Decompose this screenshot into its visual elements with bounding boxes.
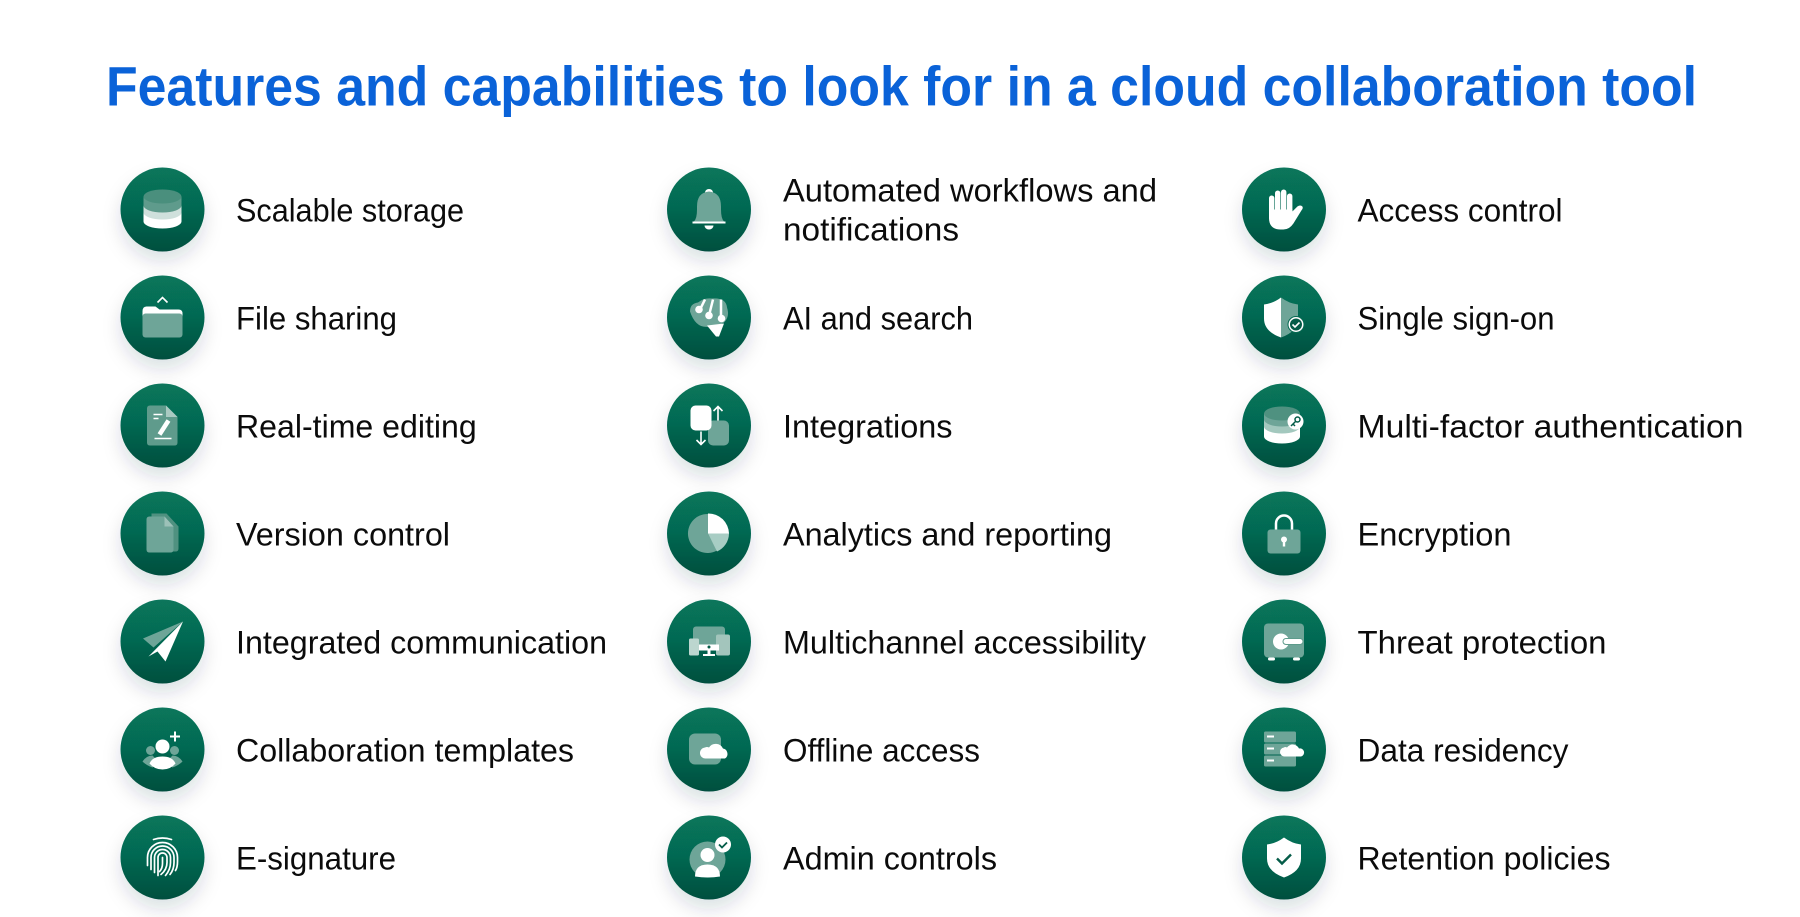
icon: user with check badge [667, 816, 751, 900]
icon: cloud on card [667, 708, 751, 792]
item: AI and search [667, 276, 973, 360]
item: Admin controls [667, 816, 997, 900]
label: E-signature [236, 840, 396, 876]
icon: document with pen [120, 384, 204, 468]
label: Admin controls [783, 840, 997, 876]
icon: fingerprint [120, 816, 204, 900]
item: Real-time editing [120, 384, 477, 468]
label: Encryption [1358, 516, 1512, 552]
item: Multichannel accessibility [667, 600, 1146, 684]
title: Features and capabilities to look for in a cloud collaboration tool [106, 54, 1697, 118]
icon: padlock [1242, 492, 1326, 576]
label: File sharing [236, 300, 397, 336]
icon: paper plane [120, 600, 204, 684]
label: Scalable storage [236, 192, 464, 228]
item: Multi-factor authentication [1242, 384, 1744, 468]
label: Real-time editing [236, 408, 477, 444]
icon: brain with funnel [667, 276, 751, 360]
item: File sharing [120, 276, 397, 360]
icon: swap squares [667, 384, 751, 468]
item: Integrated communication [120, 600, 607, 684]
label line 2: notifications [783, 212, 959, 248]
label: Version control [236, 516, 450, 552]
icon: safe [1242, 600, 1326, 684]
item: Data residency [1242, 708, 1568, 792]
label: Retention policies [1358, 840, 1610, 876]
item: Encryption [1242, 492, 1512, 576]
label: Collaboration templates [236, 732, 574, 768]
label: Multi-factor authentication [1358, 408, 1744, 444]
label: Automated workflows and [783, 172, 1157, 208]
label: Offline access [783, 732, 980, 768]
item: Integrations [667, 384, 952, 468]
icon: pie chart [667, 492, 751, 576]
label: Multichannel accessibility [783, 624, 1146, 660]
icon: folder [120, 276, 204, 360]
item: Version control [120, 492, 450, 576]
icon: database with key [1242, 384, 1326, 468]
icon: devices [667, 600, 751, 684]
icon: servers with cloud [1242, 708, 1326, 792]
item: Single sign-on [1242, 276, 1554, 360]
label: Analytics and reporting [783, 516, 1112, 552]
item: Threat protection [1242, 600, 1606, 684]
label: Data residency [1358, 732, 1568, 768]
icon: raised hand [1242, 168, 1326, 252]
item: Automated workflows and notifications [667, 168, 1157, 252]
icon: storage cylinder [120, 168, 204, 252]
item: Analytics and reporting [667, 492, 1112, 576]
item: E-signature [120, 816, 396, 900]
icon: shield with check [1242, 816, 1326, 900]
label: Integrations [783, 408, 952, 444]
label: Threat protection [1358, 624, 1606, 660]
icon: half shield with check [1242, 276, 1326, 360]
icon: people with plus [120, 708, 204, 792]
item: Collaboration templates [120, 708, 574, 792]
label: Integrated communication [236, 624, 607, 660]
label: Access control [1358, 192, 1562, 228]
icon: bell [667, 168, 751, 252]
item: Offline access [667, 708, 980, 792]
item: Retention policies [1242, 816, 1610, 900]
label: AI and search [783, 300, 973, 336]
icon: stacked pages [120, 492, 204, 576]
item: Scalable storage [120, 168, 464, 252]
item: Access control [1242, 168, 1562, 252]
label: Single sign-on [1358, 300, 1554, 336]
